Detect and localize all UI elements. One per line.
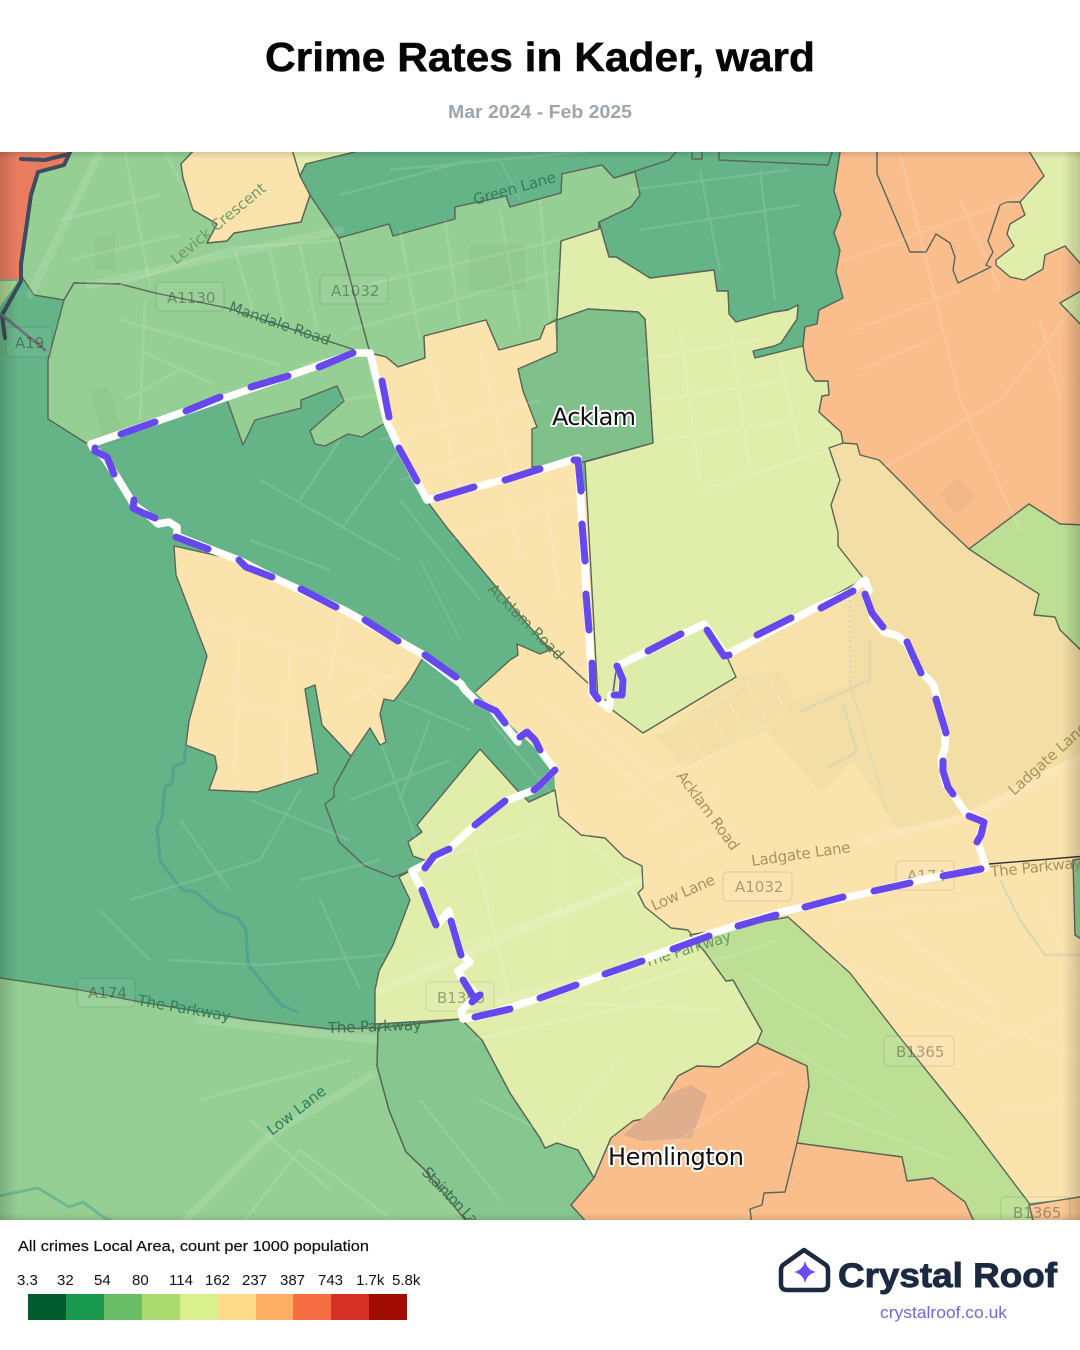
road label: Low Lane west: Low Lane	[263, 1082, 330, 1139]
region: bottom-right orange corner	[1028, 1196, 1080, 1220]
region: mid green south of Green Lane	[339, 165, 640, 367]
road shield: A1032 south: A1032	[735, 878, 783, 896]
region: right edge yellow green	[1059, 290, 1080, 325]
road shield: A1130	[156, 282, 224, 311]
region: far right mid green	[1073, 858, 1080, 942]
region: darker cream east	[830, 444, 908, 490]
road shield: A174 west	[77, 978, 135, 1007]
region: Acklam yellow green	[557, 222, 864, 700]
legend scale values: 80	[132, 1272, 149, 1289]
road label: Ladgate Lane: Ladgate Lane	[750, 838, 852, 870]
region: Hemlington darker patch	[623, 1085, 707, 1141]
region: south-west dark green outline	[325, 756, 410, 877]
road label: The Parkway on ward: The Parkway	[641, 927, 733, 971]
legend title: All crimes Local Area, count per 1000 population	[18, 1239, 369, 1255]
legend scale values: 162	[205, 1272, 230, 1289]
darker blocks	[90, 235, 975, 515]
region: top-right yellow green	[996, 146, 1080, 280]
map vignette edges	[0, 152, 1080, 1220]
road shield: A1032 north: A1032	[331, 282, 379, 300]
region: top yellow strip	[292, 152, 352, 177]
region: small yellow green block	[611, 624, 736, 733]
road shield: A174 east	[896, 861, 954, 890]
title: Crime Rates in Kader, ward	[265, 34, 815, 80]
road shield: A19: A19	[15, 334, 44, 352]
legend scale values: 3.3	[17, 1272, 38, 1289]
road label: Low Lane south: Low Lane	[648, 871, 718, 915]
legend scale values: 54	[94, 1272, 111, 1289]
legend colour bar	[28, 1294, 407, 1320]
region: central and south-east cream	[427, 490, 1080, 1203]
road label: Levick Crescent: Levick Crescent	[167, 179, 270, 268]
region: Green Lane dark green	[300, 146, 843, 358]
region: bottom-left mid green	[0, 977, 464, 1220]
place label: Hemlington: Hemlington	[608, 1143, 744, 1171]
road label: Acklam Road north: Acklam Road	[484, 580, 568, 664]
road shield: A1032 north	[320, 275, 388, 304]
subtitle: date range: Mar 2024 - Feb 2025	[448, 102, 632, 122]
legend	[17, 1239, 421, 1320]
legend scale values: 237	[242, 1272, 267, 1289]
place label: Acklam: Acklam	[552, 403, 636, 431]
road label: Mandale Road: Mandale Road	[227, 298, 333, 349]
grey footpaths in east cream area	[800, 600, 1080, 955]
Stainton boundary line	[377, 1028, 432, 1180]
region: Kader north mid green	[48, 283, 387, 446]
road shield: A174 east: A174	[907, 867, 946, 885]
road shield: B1365 bottom: B1365	[1013, 1204, 1061, 1222]
region: Acklam mid green	[518, 309, 653, 467]
legend scale values: 743	[318, 1272, 343, 1289]
A19 trunk road	[2, 150, 71, 350]
road label: Green Lane: Green Lane	[471, 168, 558, 209]
region: east orange	[803, 146, 1080, 549]
legend scale values	[17, 1272, 421, 1289]
region: north-west mid green	[21, 146, 370, 353]
logo: Crystal Roof	[781, 1250, 1058, 1322]
road shield: A19	[6, 327, 52, 357]
road shield: A1032 south	[723, 872, 792, 901]
road shield: A174 west: A174	[88, 984, 127, 1002]
ward outline white	[91, 353, 986, 1019]
road shield: B1365 at ward	[426, 982, 494, 1011]
street network	[60, 150, 1080, 1226]
region: bottom centre green	[377, 1019, 594, 1226]
region: east light green	[969, 504, 1080, 655]
road shield: B1365 at ward: B1365	[437, 989, 485, 1007]
brand name: Crystal Roof	[838, 1257, 1058, 1295]
region: Levick Crescent cream	[181, 146, 310, 243]
road label: The Parkway centre: The Parkway	[327, 1016, 422, 1037]
region: south yellow green	[375, 749, 762, 1178]
icon: house with star	[781, 1250, 828, 1290]
water streams	[0, 745, 298, 1226]
legend scale values: 387	[280, 1272, 305, 1289]
region: Kader north-east cream	[374, 320, 576, 500]
region: Hemlington orange	[571, 1043, 976, 1226]
road label: Acklam Road south: Acklam Road	[673, 768, 743, 854]
road label: Stainton Lane: Stainton Lane	[418, 1163, 494, 1241]
region: Kader south-west cream	[174, 546, 424, 792]
boundaries of cream areas	[370, 320, 550, 692]
boundary lines inside regions	[540, 146, 1080, 1226]
road shield: B1365 bottom	[1001, 1197, 1070, 1227]
road shield: B1365 east: B1365	[896, 1043, 944, 1061]
region: small green sliver by A19	[0, 281, 18, 306]
legend scale values: 114	[169, 1272, 193, 1289]
legend scale values: 5.8k	[392, 1272, 421, 1289]
ward boundary: Kader	[91, 353, 986, 1019]
region: top-left red area	[0, 146, 69, 280]
legend scale values: 32	[57, 1272, 74, 1289]
road shield: B1365 east	[884, 1036, 954, 1066]
region: lighter cream patch	[726, 592, 852, 700]
ward dashes purple	[95, 353, 984, 1017]
wide roads	[30, 152, 1080, 1226]
legend scale values: 1.7k	[356, 1272, 385, 1289]
road shield: A1130: A1130	[167, 289, 215, 307]
road label: The Parkway west: The Parkway	[135, 991, 232, 1025]
region: south-east light green	[690, 917, 1034, 1226]
website url: crystalroof.co.uk	[880, 1304, 1008, 1322]
